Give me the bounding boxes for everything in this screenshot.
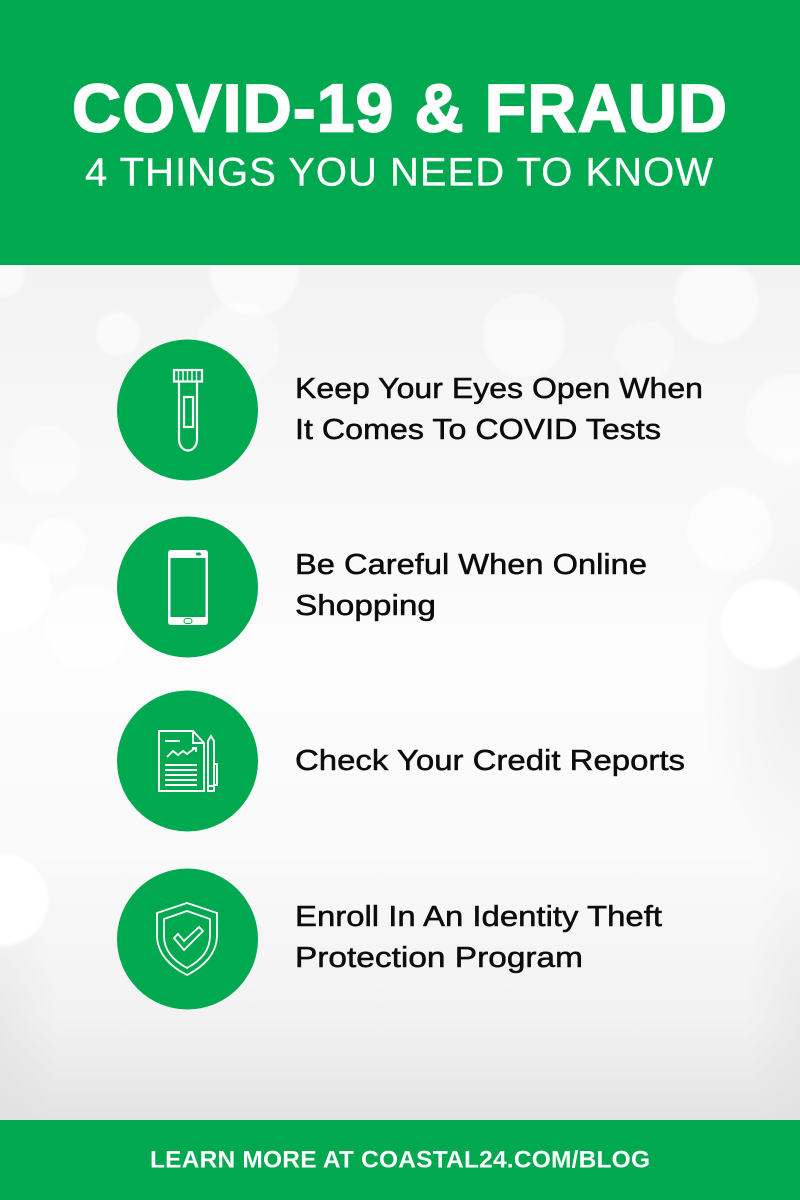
text: shopping: Shopping: [295, 590, 436, 622]
text: check credit reports: Check Your Credit Reports: [295, 745, 685, 777]
text: keep your eyes open: Keep Your Eyes Open When: [295, 373, 703, 405]
title: COVID-19 & FRAUD: [72, 70, 727, 146]
icon: report and pen: [117, 690, 258, 832]
footer text: LEARN MORE AT COASTAL24.COM/BLOG: [150, 1146, 650, 1174]
subtitle: 4 THINGS YOU NEED TO KNOW: [85, 150, 713, 194]
item 3: credit reports: [117, 690, 685, 832]
text: enroll: Enroll In An Identity Theft: [295, 901, 662, 933]
text: protection program: Protection Program: [295, 942, 583, 974]
icon: shield with check: [117, 868, 258, 1010]
text: be careful: Be Careful When Online: [295, 549, 647, 581]
background: [0, 265, 800, 1120]
item 1: covid tests: [117, 340, 703, 480]
icon: test tube: [117, 340, 258, 480]
icon: smartphone: [117, 516, 258, 658]
item 4: identity theft protection: [117, 868, 662, 1010]
header band: [0, 0, 800, 265]
footer band: [0, 1120, 800, 1200]
item 2: online shopping: [117, 516, 647, 658]
text: covid tests: It Comes To COVID Tests: [295, 414, 661, 446]
